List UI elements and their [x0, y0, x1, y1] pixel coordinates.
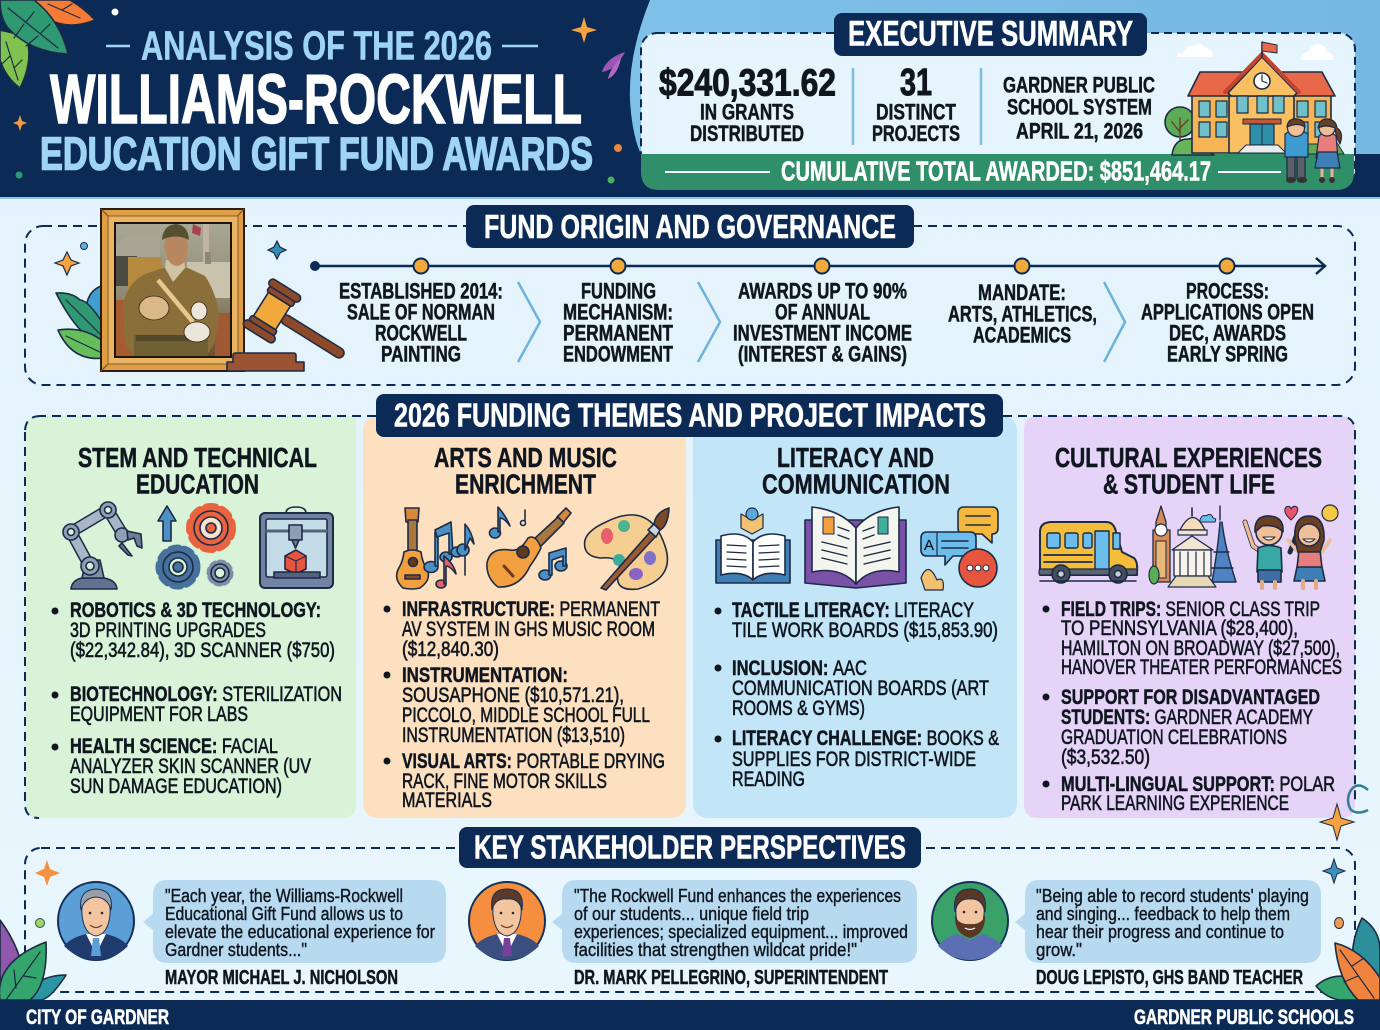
stat: system and date: APRIL 21, 2026: [1016, 118, 1143, 144]
step: awards up to 90%: AWARDS UP TO 90%: [738, 278, 907, 304]
list: literacy projects: LITERACY CHALLENGE: BOOKS &: [732, 727, 999, 750]
illustration: framed Rockwell painting: [101, 209, 244, 371]
stat: system and date: [1003, 72, 1155, 144]
panel: key stakeholder perspectives: [25, 827, 1355, 992]
quote: Dr. Pellegrino: "The Rockwell Fund enhances the experiences: [574, 885, 901, 906]
name: Dr. Pellegrino: DR. MARK PELLEGRINO, SUPERINTENDENT: [574, 967, 888, 989]
step: funding mechanism: FUNDING: [581, 278, 656, 304]
step: mandate: MANDATE:: [978, 280, 1066, 305]
heading: fund origin: [466, 205, 914, 248]
list: arts projects: ($12,840.30): [402, 638, 499, 661]
list: STEM projects: EQUIPMENT FOR LABS: [70, 703, 248, 726]
list: cultural projects: FIELD TRIPS: SENIOR CLASS TRIP: [1061, 598, 1320, 621]
list: literacy projects: [714, 599, 999, 791]
step: awards up to 90%: [733, 278, 912, 366]
portrait: Dr. Pellegrino: [469, 882, 545, 960]
heading: 2026 funding themes: [376, 394, 1003, 437]
icon: music notes: [424, 507, 567, 588]
header decoration: sparkles and dots: [13, 8, 625, 184]
list: STEM projects: HEALTH SCIENCE: FACIAL: [70, 735, 278, 758]
step: process: [1141, 278, 1314, 366]
stat: grants distributed: $240,331.62: [659, 62, 836, 104]
arrow: [1104, 282, 1125, 362]
icon: landmarks: [1149, 506, 1236, 587]
quote: Dr. Pellegrino: of our students... unique field trip: [574, 903, 809, 924]
stat: grants distributed: DISTRIBUTED: [690, 121, 804, 146]
icon: angled guitar: [487, 508, 571, 587]
header decoration: leaves: [0, 0, 95, 88]
step: awards up to 90%: OF ANNUAL: [775, 300, 870, 324]
step: established 2014: ROCKWELL: [375, 320, 467, 346]
heading: key stakeholders: [459, 827, 921, 868]
girl: [1322, 165, 1332, 178]
icon: gears and arrow: [158, 506, 231, 585]
list: cultural projects: PARK LEARNING EXPERIENCE: [1061, 792, 1289, 815]
list: literacy projects: INCLUSION: AAC: [732, 657, 867, 680]
name: Mayor Nicholson: MAYOR MICHAEL J. NICHOLSON: [165, 967, 398, 989]
icon: large open book: [805, 507, 906, 588]
list: cultural projects: GRADUATION CELEBRATIONS: [1061, 726, 1287, 749]
step: established 2014: [339, 278, 503, 366]
list: literacy projects: READING: [732, 768, 805, 791]
stat: distinct projects: PROJECTS: [872, 121, 960, 146]
panel: literacy and communication: [693, 416, 1017, 818]
heading: literacy: COMMUNICATION: [762, 468, 950, 500]
step: process: EARLY SPRING: [1167, 342, 1288, 366]
quote: Doug Lepisto: grow.": [1036, 939, 1082, 960]
list: arts projects: SOUSAPHONE ($10,571.21),: [402, 684, 624, 707]
step: funding mechanism: ENDOWMENT: [563, 342, 673, 366]
stat: system and date: SCHOOL SYSTEM: [1007, 94, 1152, 120]
icon: gavel: [227, 278, 358, 379]
decoration: leaves bottom right: [1316, 918, 1380, 1000]
list: cultural projects: [1042, 598, 1342, 815]
quote: Dr. Pellegrino: facilities that strengthen wildcat pride!": [574, 939, 857, 960]
heading: key stakeholders: KEY STAKEHOLDER PERSPECTIVES: [474, 828, 906, 866]
list: cultural projects: ($3,532.50): [1061, 746, 1150, 769]
stat: distinct projects: [872, 62, 960, 146]
heading: literacy: LITERACY AND: [777, 442, 934, 473]
stat: distinct projects: 31: [900, 62, 932, 104]
step: funding mechanism: PERMANENT: [563, 320, 673, 346]
stat: grants distributed: IN GRANTS: [700, 100, 794, 124]
list: arts projects: [384, 598, 665, 812]
quote: Mayor Nicholson: elevate the educational experience for: [165, 921, 435, 942]
list: STEM projects: ($22,342.84), 3D SCANNER ($750): [70, 639, 335, 662]
heading: literacy: [762, 442, 950, 500]
heading: cultural: [1055, 442, 1322, 500]
quote: Mayor Nicholson: "Each year, the Williams-Rockwell: [165, 885, 403, 906]
step: awards up to 90%: INVESTMENT INCOME: [733, 320, 912, 346]
list: literacy projects: TILE WORK BOARDS ($15,853.90): [732, 619, 998, 642]
header banner: [0, 0, 1380, 199]
footer bar: [0, 1000, 1380, 1030]
quote: Dr. Pellegrino: experiences; specialized equipment... improved: [574, 921, 908, 942]
panel: executive summary: [641, 13, 1355, 190]
heading: cultural: & STUDENT LIFE: [1103, 468, 1275, 500]
icon: leaves behind painting: [56, 285, 104, 358]
heading: arts and music: ENRICHMENT: [455, 468, 596, 500]
boy: [1287, 155, 1295, 179]
list: cultural projects: STUDENTS: GARDNER ACADEMY: [1061, 706, 1313, 729]
panel: cultural experiences and student life: [1024, 416, 1355, 818]
list: literacy projects: COMMUNICATION BOARDS (ART: [732, 677, 989, 700]
list: STEM projects: BIOTECHNOLOGY: STERILIZATION: [70, 683, 342, 706]
section outline: funding themes: [25, 416, 1355, 818]
panel: arts and music enrichment: [363, 416, 686, 818]
step: mandate: [948, 280, 1097, 348]
heading: arts and music: [434, 442, 617, 500]
step: established 2014: ESTABLISHED 2014:: [339, 278, 503, 304]
list: STEM projects: SUN DAMAGE EDUCATION): [70, 775, 282, 798]
stat: system and date: GARDNER PUBLIC: [1003, 72, 1155, 98]
step: process: APPLICATIONS OPEN: [1141, 300, 1314, 324]
panel: STEM and technical education: [25, 416, 356, 818]
list: arts projects: INFRASTRUCTURE: PERMANENT: [402, 598, 660, 621]
list: STEM projects: ROBOTICS & 3D TECHNOLOGY:: [70, 599, 321, 622]
icon: school and students: [1165, 42, 1344, 183]
decoration: sparkles in stakeholder section: [35, 859, 1345, 928]
step: mandate: ARTS, ATHLETICS,: [948, 302, 1097, 326]
step: mandate: ACADEMICS: [973, 322, 1071, 348]
icon: upright guitar: [397, 508, 429, 589]
step: awards up to 90%: (INTEREST & GAINS): [738, 342, 907, 366]
heading: arts and music: ARTS AND MUSIC: [434, 442, 617, 473]
list: arts projects: AV SYSTEM IN GHS MUSIC ROOM: [402, 618, 655, 641]
step: process: PROCESS:: [1186, 278, 1269, 304]
icon: waving children: [1245, 505, 1338, 588]
stat: distinct projects: DISTINCT: [876, 100, 956, 124]
portrait: Doug Lepisto: [932, 882, 1008, 960]
list: arts projects: RACK, FINE MOTOR SKILLS: [402, 770, 607, 793]
list: STEM projects: [52, 599, 342, 798]
step: established 2014: SALE OF NORMAN: [347, 300, 495, 324]
arrow: [698, 282, 720, 362]
stat: grants distributed: [659, 62, 836, 146]
icon: speech bubbles: [921, 507, 998, 590]
icon: small open book: [716, 508, 790, 583]
banner: cumulative total: CUMULATIVE TOTAL AWARDED: $851,464.17: [781, 156, 1211, 186]
list: literacy projects: TACTILE LITERACY: LITERACY: [732, 599, 974, 622]
quote: Dr. Pellegrino: [552, 880, 917, 963]
step: funding mechanism: MECHANISM:: [563, 300, 673, 324]
quote: Doug Lepisto: "Being able to record students' playing: [1036, 885, 1309, 906]
panel: fund origin and governance: [25, 205, 1355, 385]
list: arts projects: PICCOLO, MIDDLE SCHOOL FULL: [402, 704, 650, 727]
icons: sparkles: [55, 241, 286, 275]
list: arts projects: VISUAL ARTS: PORTABLE DRYING: [402, 750, 665, 773]
portrait: Mayor Nicholson: [58, 882, 134, 960]
step: funding mechanism: [563, 278, 673, 366]
icon: speech bubbles: A: [924, 537, 934, 554]
icon: school bus: [1039, 522, 1137, 583]
list: literacy projects: SUPPLIES FOR DISTRICT-WIDE: [732, 748, 976, 771]
list: cultural projects: MULTI-LINGUAL SUPPORT: POLAR: [1061, 773, 1335, 796]
icon: 3D printer: [260, 507, 333, 588]
quote: Doug Lepisto: hear their progress and continue to: [1036, 921, 1284, 942]
heading: executive summary: [834, 13, 1147, 56]
list: arts projects: INSTRUMENTATION ($13,510): [402, 724, 625, 747]
title: ANALYSIS OF THE 2026: [141, 22, 492, 68]
step: process: DEC, AWARDS: [1169, 320, 1286, 346]
heading: STEM: EDUCATION: [136, 468, 259, 500]
icon: robotic arm: [63, 502, 142, 589]
heading: STEM: STEM AND TECHNICAL: [78, 442, 317, 473]
list: arts projects: INSTRUMENTATION:: [402, 664, 568, 687]
title: EDUCATION GIFT FUND AWARDS: [40, 128, 593, 180]
step: established 2014: PAINTING: [381, 342, 461, 366]
decoration: star and swirl near right margin: [1320, 786, 1368, 840]
heading: executive summary: EXECUTIVE SUMMARY: [848, 14, 1133, 54]
list: STEM projects: 3D PRINTING UPGRADES: [70, 619, 266, 642]
list: STEM projects: ANALYZER SKIN SCANNER (UV: [70, 755, 311, 778]
decoration: leaves bottom left: [0, 920, 66, 1000]
title: [40, 22, 593, 180]
list: cultural projects: TO PENNSYLVANIA ($28,400),: [1061, 617, 1298, 640]
quote: Mayor Nicholson: Gardner students...": [165, 939, 307, 960]
timeline with five milestones: [310, 258, 1325, 274]
title: WILLIAMS-ROCKWELL: [50, 60, 582, 138]
list: arts projects: MATERIALS: [402, 789, 492, 812]
quote: Mayor Nicholson: [143, 880, 446, 963]
quote: Mayor Nicholson: Educational Gift Fund allows us to: [165, 903, 403, 924]
quote: Doug Lepisto: [1015, 880, 1321, 963]
quote: Doug Lepisto: and singing... feedback to help them: [1036, 903, 1290, 924]
icon: paint palette and brush: [585, 508, 669, 590]
heading: STEM: [78, 442, 317, 500]
heading: fund origin: FUND ORIGIN AND GOVERNANCE: [484, 208, 896, 245]
arrow: [518, 282, 540, 362]
footer: city of Gardner: CITY OF GARDNER: [26, 1006, 169, 1029]
heading: 2026 funding themes: 2026 FUNDING THEMES AND PROJECT IMPACTS: [394, 396, 986, 434]
list: literacy projects: ROOMS & GYMS): [732, 697, 865, 720]
